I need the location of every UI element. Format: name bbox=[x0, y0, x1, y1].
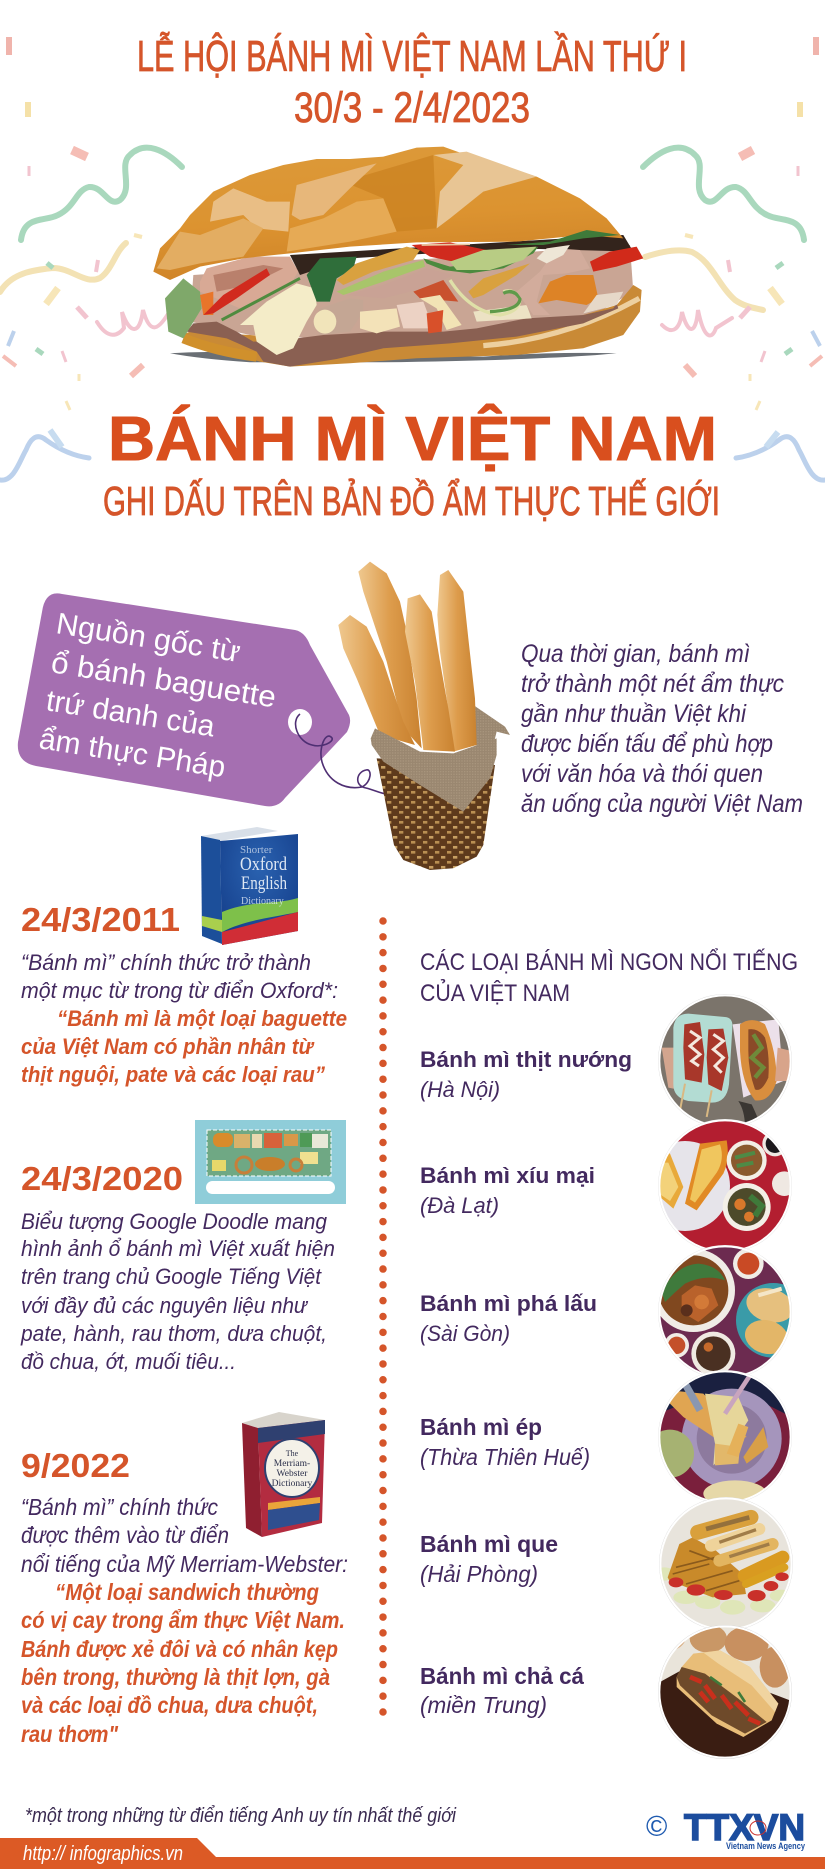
back cloth bbox=[473, 705, 510, 747]
dotted column divider bbox=[379, 921, 387, 1714]
text block: intro: Qua thời gian, bánh mì bbox=[521, 640, 750, 668]
photo: pressed banh mi bbox=[658, 1370, 792, 1500]
shadow bbox=[170, 352, 617, 362]
cucumber strip bbox=[337, 260, 425, 295]
front cloth bbox=[371, 728, 497, 812]
quote: và các loại đồ chua, dưa chuột, bbox=[21, 1692, 318, 1718]
timeline entry: 9/2022 bbox=[21, 1447, 348, 1747]
footer band with website: http:// infographics.vn bbox=[23, 1843, 183, 1865]
tag text: Nguồn gốc từ bbox=[54, 607, 243, 669]
icon: Oxford dictionary books bbox=[201, 827, 298, 945]
list item: Bánh mì chả cá: (miền Trung) bbox=[420, 1692, 547, 1718]
description: một mục từ trong từ điển Oxford*: bbox=[21, 978, 338, 1003]
quote: của Việt Nam có phần nhân từ bbox=[21, 1034, 315, 1059]
cream pieces bbox=[314, 310, 336, 334]
timeline entry: 24/3/2020: 24/3/2020 bbox=[21, 1160, 183, 1197]
list item: Bánh mì xíu mại: Bánh mì xíu mại bbox=[420, 1163, 595, 1188]
text block: intro: được biến tấu để phù hợp bbox=[521, 730, 773, 758]
main title bbox=[103, 405, 720, 524]
icon: Oxford dictionary books: Shorter bbox=[240, 844, 273, 856]
right blue ribbon bbox=[736, 437, 825, 480]
quote: “Bánh mì là một loại baguette bbox=[57, 1006, 347, 1031]
onion and herb curl bbox=[450, 280, 520, 315]
right carrot stick bbox=[468, 263, 530, 298]
icon: Merriam-Webster dictionary: The bbox=[286, 1449, 299, 1458]
mayonnaise roll bbox=[240, 283, 317, 355]
quote bbox=[21, 1006, 347, 1087]
photo: grilled pork banh mi bbox=[658, 994, 792, 1128]
baguette: tall back bbox=[358, 562, 422, 748]
description: với đầy đủ các nguyên liệu như bbox=[21, 1293, 309, 1318]
basket bbox=[377, 758, 495, 870]
icon: Oxford dictionary books: English bbox=[241, 873, 287, 894]
left pink ribbon bbox=[97, 310, 168, 335]
cilantro bbox=[165, 278, 202, 338]
carrot stick bbox=[337, 247, 420, 285]
description: nổi tiếng của Mỹ Merriam-Webster: bbox=[21, 1551, 348, 1577]
confetti and ribbons decoration bbox=[0, 37, 825, 480]
description: được thêm vào từ điển bbox=[21, 1522, 229, 1548]
photo: meatball banh mi bbox=[658, 1119, 792, 1249]
description bbox=[20, 1209, 335, 1374]
description: trên trang chủ Google Tiếng Việt bbox=[21, 1264, 322, 1289]
photo: fish cake banh mi bbox=[658, 1625, 792, 1759]
list item: Bánh mì thịt nướng: Bánh mì thịt nướng bbox=[420, 1047, 632, 1072]
quote: “Một loại sandwich thường bbox=[55, 1579, 319, 1605]
title: festival name and date: 30/3 - 2/4/2023 bbox=[294, 84, 530, 132]
globe mark bbox=[750, 1821, 766, 1835]
list item: Bánh mì ép: Bánh mì ép bbox=[420, 1414, 542, 1440]
list item: Bánh mì thịt nướng bbox=[420, 1047, 632, 1102]
description bbox=[21, 950, 338, 1003]
description: Biểu tượng Google Doodle mang bbox=[21, 1209, 328, 1234]
confetti strips bbox=[3, 37, 822, 447]
herb greens bbox=[307, 257, 357, 302]
description: “Bánh mì” chính thức bbox=[21, 1494, 218, 1520]
description: hình ảnh ổ bánh mì Việt xuất hiện bbox=[21, 1236, 335, 1261]
logo: TTXVN: Vietnam News Agency bbox=[726, 1841, 806, 1852]
icon: Merriam-Webster dictionary bbox=[242, 1412, 325, 1537]
bread flakes bbox=[343, 155, 437, 232]
baguette: front bbox=[405, 594, 455, 752]
ham middle bbox=[347, 268, 453, 298]
icon: Oxford dictionary books: Oxford bbox=[240, 854, 287, 875]
logo: TTXVN bbox=[646, 1807, 806, 1852]
lower bun bbox=[182, 285, 642, 367]
tag hole bbox=[288, 709, 312, 735]
right ham slice bbox=[517, 248, 590, 315]
panel: purple price tag bbox=[18, 593, 386, 806]
list item: Bánh mì xíu mại bbox=[420, 1163, 595, 1218]
title: festival name and date bbox=[137, 31, 687, 132]
icon: Oxford dictionary books: Dictionary bbox=[241, 896, 284, 907]
tag text bbox=[37, 607, 278, 784]
cucumber slice bbox=[423, 247, 538, 273]
quote bbox=[21, 1579, 345, 1747]
illustration: Vietnamese sandwich bbox=[153, 147, 643, 367]
quote: có vị cay trong ẩm thực Việt Nam. bbox=[21, 1607, 345, 1633]
photo: offal stew banh mi bbox=[658, 1245, 792, 1374]
filling backdrop bbox=[190, 245, 633, 342]
icon: Merriam-Webster dictionary: Merriam- bbox=[274, 1459, 310, 1469]
text block: intro: với văn hóa và thói quen bbox=[521, 760, 763, 788]
baguette: left bbox=[338, 615, 415, 745]
left blue ribbon bbox=[0, 437, 89, 480]
list item: Bánh mì ép: (Thừa Thiên Huế) bbox=[420, 1444, 590, 1470]
logo: TTXVN: © bbox=[646, 1811, 667, 1843]
cucumber slices bbox=[654, 1567, 792, 1615]
quote: thịt nguội, pate và các loại rau” bbox=[21, 1062, 325, 1087]
heading: famous types of banh mi: CỦA VIỆT NAM bbox=[420, 978, 570, 1007]
tag text: ẩm thực Pháp bbox=[37, 722, 228, 784]
toasted bread bbox=[670, 1391, 746, 1438]
top chilli bbox=[412, 242, 487, 262]
list item: Bánh mì que: Bánh mì que bbox=[420, 1531, 558, 1557]
right green ribbon bbox=[643, 148, 804, 240]
list item: Bánh mì thịt nướng: (Hà Nội) bbox=[420, 1077, 500, 1102]
text block: intro bbox=[521, 640, 803, 818]
left green ribbon bbox=[21, 148, 182, 240]
list item: Bánh mì chả cá bbox=[420, 1663, 584, 1718]
footer band with website bbox=[0, 1838, 825, 1869]
description: pate, hành, rau thơm, dưa chuột, bbox=[20, 1321, 327, 1346]
description: đồ chua, ớt, muối tiêu... bbox=[21, 1349, 236, 1374]
quote: bên trong, thường là thịt lợn, gà bbox=[21, 1664, 330, 1690]
tag string bbox=[296, 714, 386, 794]
description bbox=[21, 1494, 348, 1577]
tongs bbox=[685, 1384, 700, 1410]
green top strand bbox=[507, 230, 620, 245]
left ham slice bbox=[200, 257, 298, 308]
left yellow ribbon bbox=[0, 243, 126, 292]
heading: famous types of banh mi bbox=[420, 948, 798, 1007]
list item: Bánh mì xíu mại: (Đà Lạt) bbox=[420, 1193, 499, 1218]
list item: Bánh mì que bbox=[420, 1531, 558, 1587]
tag text: trứ danh của bbox=[44, 684, 217, 744]
baguette: right bbox=[437, 570, 477, 752]
red chilli strip bbox=[200, 292, 213, 315]
timeline entry: 24/3/2011: 24/3/2011 bbox=[21, 901, 180, 938]
right pink ribbon bbox=[662, 310, 732, 335]
timeline entry: 24/3/2020 bbox=[20, 1160, 335, 1374]
list item: Bánh mì phá lấu: Bánh mì phá lấu bbox=[420, 1291, 597, 1316]
seal bbox=[265, 1439, 319, 1497]
search bar bbox=[206, 1181, 335, 1194]
logo: TTXVN: TTXVN bbox=[684, 1807, 805, 1848]
footnote: *một trong những từ điển tiếng Anh uy tín nhất thế giới bbox=[25, 1805, 456, 1827]
description: “Bánh mì” chính thức trở thành bbox=[21, 950, 311, 975]
pate layer bbox=[187, 303, 618, 367]
quote: rau thơm" bbox=[21, 1721, 119, 1747]
top bun bbox=[153, 147, 623, 280]
photo: stick banh mi bbox=[654, 1497, 793, 1631]
list item: Bánh mì chả cá: Bánh mì chả cá bbox=[420, 1663, 584, 1689]
list item: Bánh mì phá lấu: (Sài Gòn) bbox=[420, 1321, 510, 1346]
right yellow ribbon bbox=[645, 250, 763, 310]
text block: intro: trở thành một nét ẩm thực bbox=[521, 670, 784, 698]
tag text: ổ bánh baguette bbox=[49, 646, 278, 714]
text block: intro: gần như thuần Việt khi bbox=[521, 700, 747, 728]
list item: Bánh mì que: (Hải Phòng) bbox=[420, 1561, 538, 1587]
icon: Merriam-Webster dictionary: Webster bbox=[277, 1469, 308, 1479]
timeline entry: 24/3/2011 bbox=[21, 901, 347, 1087]
tomatoes bbox=[669, 1572, 789, 1601]
list item: Bánh mì phá lấu bbox=[420, 1291, 597, 1346]
quote: Bánh được xẻ đôi và có nhân kẹp bbox=[21, 1636, 338, 1662]
icon: Merriam-Webster dictionary: Dictionary bbox=[272, 1479, 313, 1489]
list item: Bánh mì ép bbox=[420, 1414, 590, 1470]
squash bbox=[538, 275, 598, 305]
image: Google Doodle bbox=[195, 1120, 346, 1204]
timeline entry: 9/2022: 9/2022 bbox=[21, 1447, 130, 1484]
illustration: baguettes in a basket bbox=[338, 562, 510, 870]
main title: BÁNH MÌ VIỆT NAM bbox=[108, 405, 717, 474]
right chilli bbox=[590, 247, 643, 272]
